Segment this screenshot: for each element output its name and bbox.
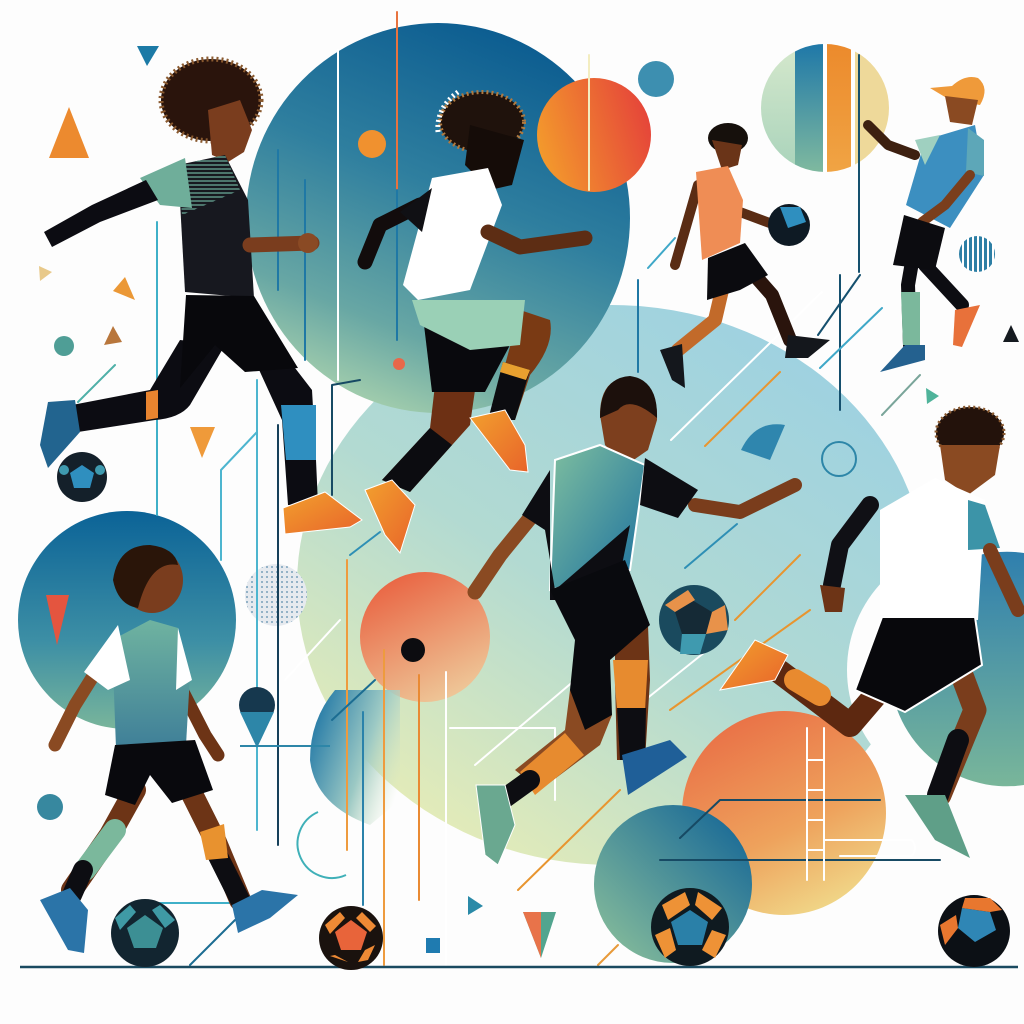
sleeve black (400, 188, 432, 232)
sleeve (915, 135, 940, 165)
boot (622, 740, 687, 795)
back arm (365, 205, 420, 262)
back arm (868, 125, 915, 155)
leg right (190, 790, 240, 900)
small dot (393, 358, 405, 370)
shorts (855, 617, 982, 712)
sock (488, 362, 530, 420)
circle: small teal left (54, 336, 74, 356)
back leg (678, 290, 722, 350)
leg left (72, 790, 135, 890)
circle: small orange (358, 130, 386, 158)
player: center (475, 376, 795, 865)
sock blue (281, 405, 316, 460)
black dot (401, 638, 425, 662)
player: top mid small (660, 123, 830, 388)
shape: lower left blue blob (310, 690, 400, 825)
map pin marker (239, 687, 330, 748)
ball: left (57, 452, 107, 502)
back arm (832, 505, 870, 585)
boot green (476, 785, 515, 865)
shoe (283, 492, 362, 534)
stripes (200, 824, 228, 860)
shorts (105, 740, 213, 805)
shorts (180, 295, 298, 388)
ball: held (768, 204, 810, 246)
hair (161, 59, 261, 141)
thin accent lines (78, 12, 940, 965)
shorts (550, 560, 650, 730)
hair (440, 92, 524, 152)
black sock right (215, 850, 240, 900)
head (121, 547, 183, 613)
shoe orange (720, 640, 788, 690)
boot blue (40, 400, 80, 468)
circle: top blue (246, 23, 630, 413)
ball: orange (319, 906, 383, 970)
circle: striped top right (760, 44, 891, 172)
shoe 2 (365, 480, 415, 553)
front leg (250, 350, 318, 505)
ball: lower center (651, 888, 729, 966)
player: top right (868, 77, 985, 372)
front arm (250, 243, 312, 245)
shorts green (412, 300, 525, 350)
left arm (55, 665, 100, 745)
sleeve right (966, 128, 984, 176)
hair (708, 123, 748, 153)
shoes (660, 335, 830, 388)
ring outlines (298, 442, 856, 878)
sleeve (140, 158, 192, 208)
left leg (515, 690, 612, 790)
black sock left (505, 780, 530, 798)
circle: mid orange (360, 572, 490, 702)
head (945, 96, 978, 125)
sleeves (84, 625, 192, 690)
circle: right blue-green (890, 552, 1024, 786)
sleeve (968, 500, 1000, 550)
sock (901, 292, 920, 345)
white hair specks (438, 92, 458, 132)
circle: top orange-red (537, 78, 651, 192)
circle: large lower orange (682, 711, 886, 915)
front arm (990, 550, 1018, 610)
circle: striped blue small (959, 236, 995, 272)
head (600, 377, 657, 466)
shoe green (905, 795, 970, 858)
shoe orange (953, 305, 980, 347)
right arm (695, 485, 795, 512)
player: right (720, 407, 1018, 858)
circle: small teal (638, 61, 674, 97)
hair (600, 376, 657, 418)
black sock (617, 708, 646, 760)
sock band (500, 362, 530, 380)
hair (113, 545, 178, 608)
shorts (893, 215, 945, 270)
fist (298, 233, 318, 253)
player: lower left (40, 545, 298, 953)
front arm (922, 175, 970, 222)
head (465, 125, 524, 190)
head (940, 445, 1000, 495)
right sleeve (640, 458, 698, 518)
ball: lower right (938, 895, 1010, 967)
sock stripe (146, 390, 158, 420)
shirt black panels (522, 470, 630, 600)
back leg (382, 385, 475, 492)
green sock (85, 830, 115, 870)
front leg (940, 670, 975, 795)
front leg (488, 310, 551, 420)
orange sock left (520, 733, 584, 795)
shirt (403, 168, 502, 300)
shoe 1 (470, 410, 528, 472)
boot right (232, 890, 298, 933)
front arm (488, 232, 585, 247)
circle: small teal lower left (37, 794, 63, 820)
shorts black (424, 325, 510, 392)
player: top left (40, 59, 362, 534)
shorts (707, 243, 768, 300)
ball: center (659, 585, 729, 655)
circle: stippled grey (245, 564, 307, 626)
sock (938, 740, 958, 795)
legs (908, 262, 962, 345)
baseline (20, 966, 1018, 968)
orange sock (613, 660, 648, 710)
player: top center (365, 92, 585, 553)
right leg (615, 620, 650, 760)
head (208, 100, 252, 162)
boot left (40, 888, 88, 953)
shirt (880, 478, 985, 620)
head (712, 140, 742, 170)
back sock (382, 428, 452, 492)
circle: white ring behind right player (847, 542, 1024, 798)
front leg (750, 270, 790, 340)
back arm (44, 180, 158, 247)
hair (936, 407, 1004, 459)
hand (820, 585, 845, 612)
shirt (906, 125, 984, 228)
shoe blue (880, 345, 925, 372)
black sock (72, 870, 83, 895)
back leg (72, 340, 225, 432)
ball: lower left (111, 899, 179, 967)
circle: lower blue-green (594, 805, 752, 963)
shirt (112, 620, 190, 748)
circle: large pale blue-green (297, 305, 927, 865)
back leg (780, 672, 880, 725)
shirt stripes (178, 155, 240, 215)
shirt (550, 445, 645, 590)
left arm (475, 512, 535, 592)
orange sock (795, 680, 820, 695)
cap (930, 77, 985, 105)
circle: left blue (18, 511, 236, 729)
right arm (182, 690, 218, 755)
arms (675, 185, 775, 265)
shirt (696, 166, 743, 260)
shirt (178, 155, 254, 298)
